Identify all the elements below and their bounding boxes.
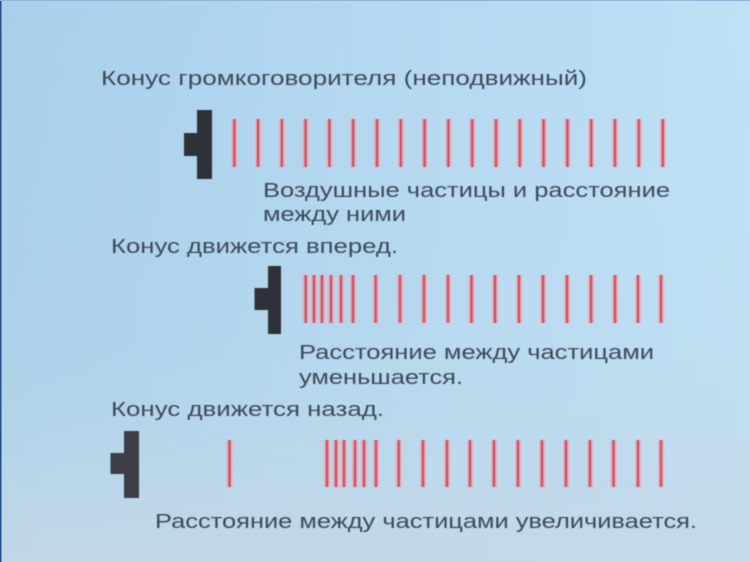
heading: cone moves backward: Конус движется назад. [111,399,384,421]
panel: cone moves forward [111,236,661,389]
caption: distance increases: Расстояние между частицами увеличивается. [155,511,697,533]
icon: speaker cone [184,110,212,179]
air particles rarefied [230,440,661,487]
icon: speaker cone forward [254,266,281,334]
caption: second line: между ними [263,204,406,226]
air particles evenly spaced [234,119,663,167]
panel: stationary cone [101,68,670,226]
caption: air particles: Воздушные частицы и расстояние [263,180,670,202]
heading: cone moves forward: Конус движется вперед. [111,236,398,258]
panel: cone moves backward [110,399,697,533]
caption: second line: уменьшается. [299,367,463,389]
heading: stationary cone: Конус громкоговорителя (неподвижный) [101,68,587,90]
icon: speaker cone backward [110,431,139,498]
air particles compressed [306,275,661,323]
caption: distance decreases: Расстояние между частицами [299,342,654,364]
